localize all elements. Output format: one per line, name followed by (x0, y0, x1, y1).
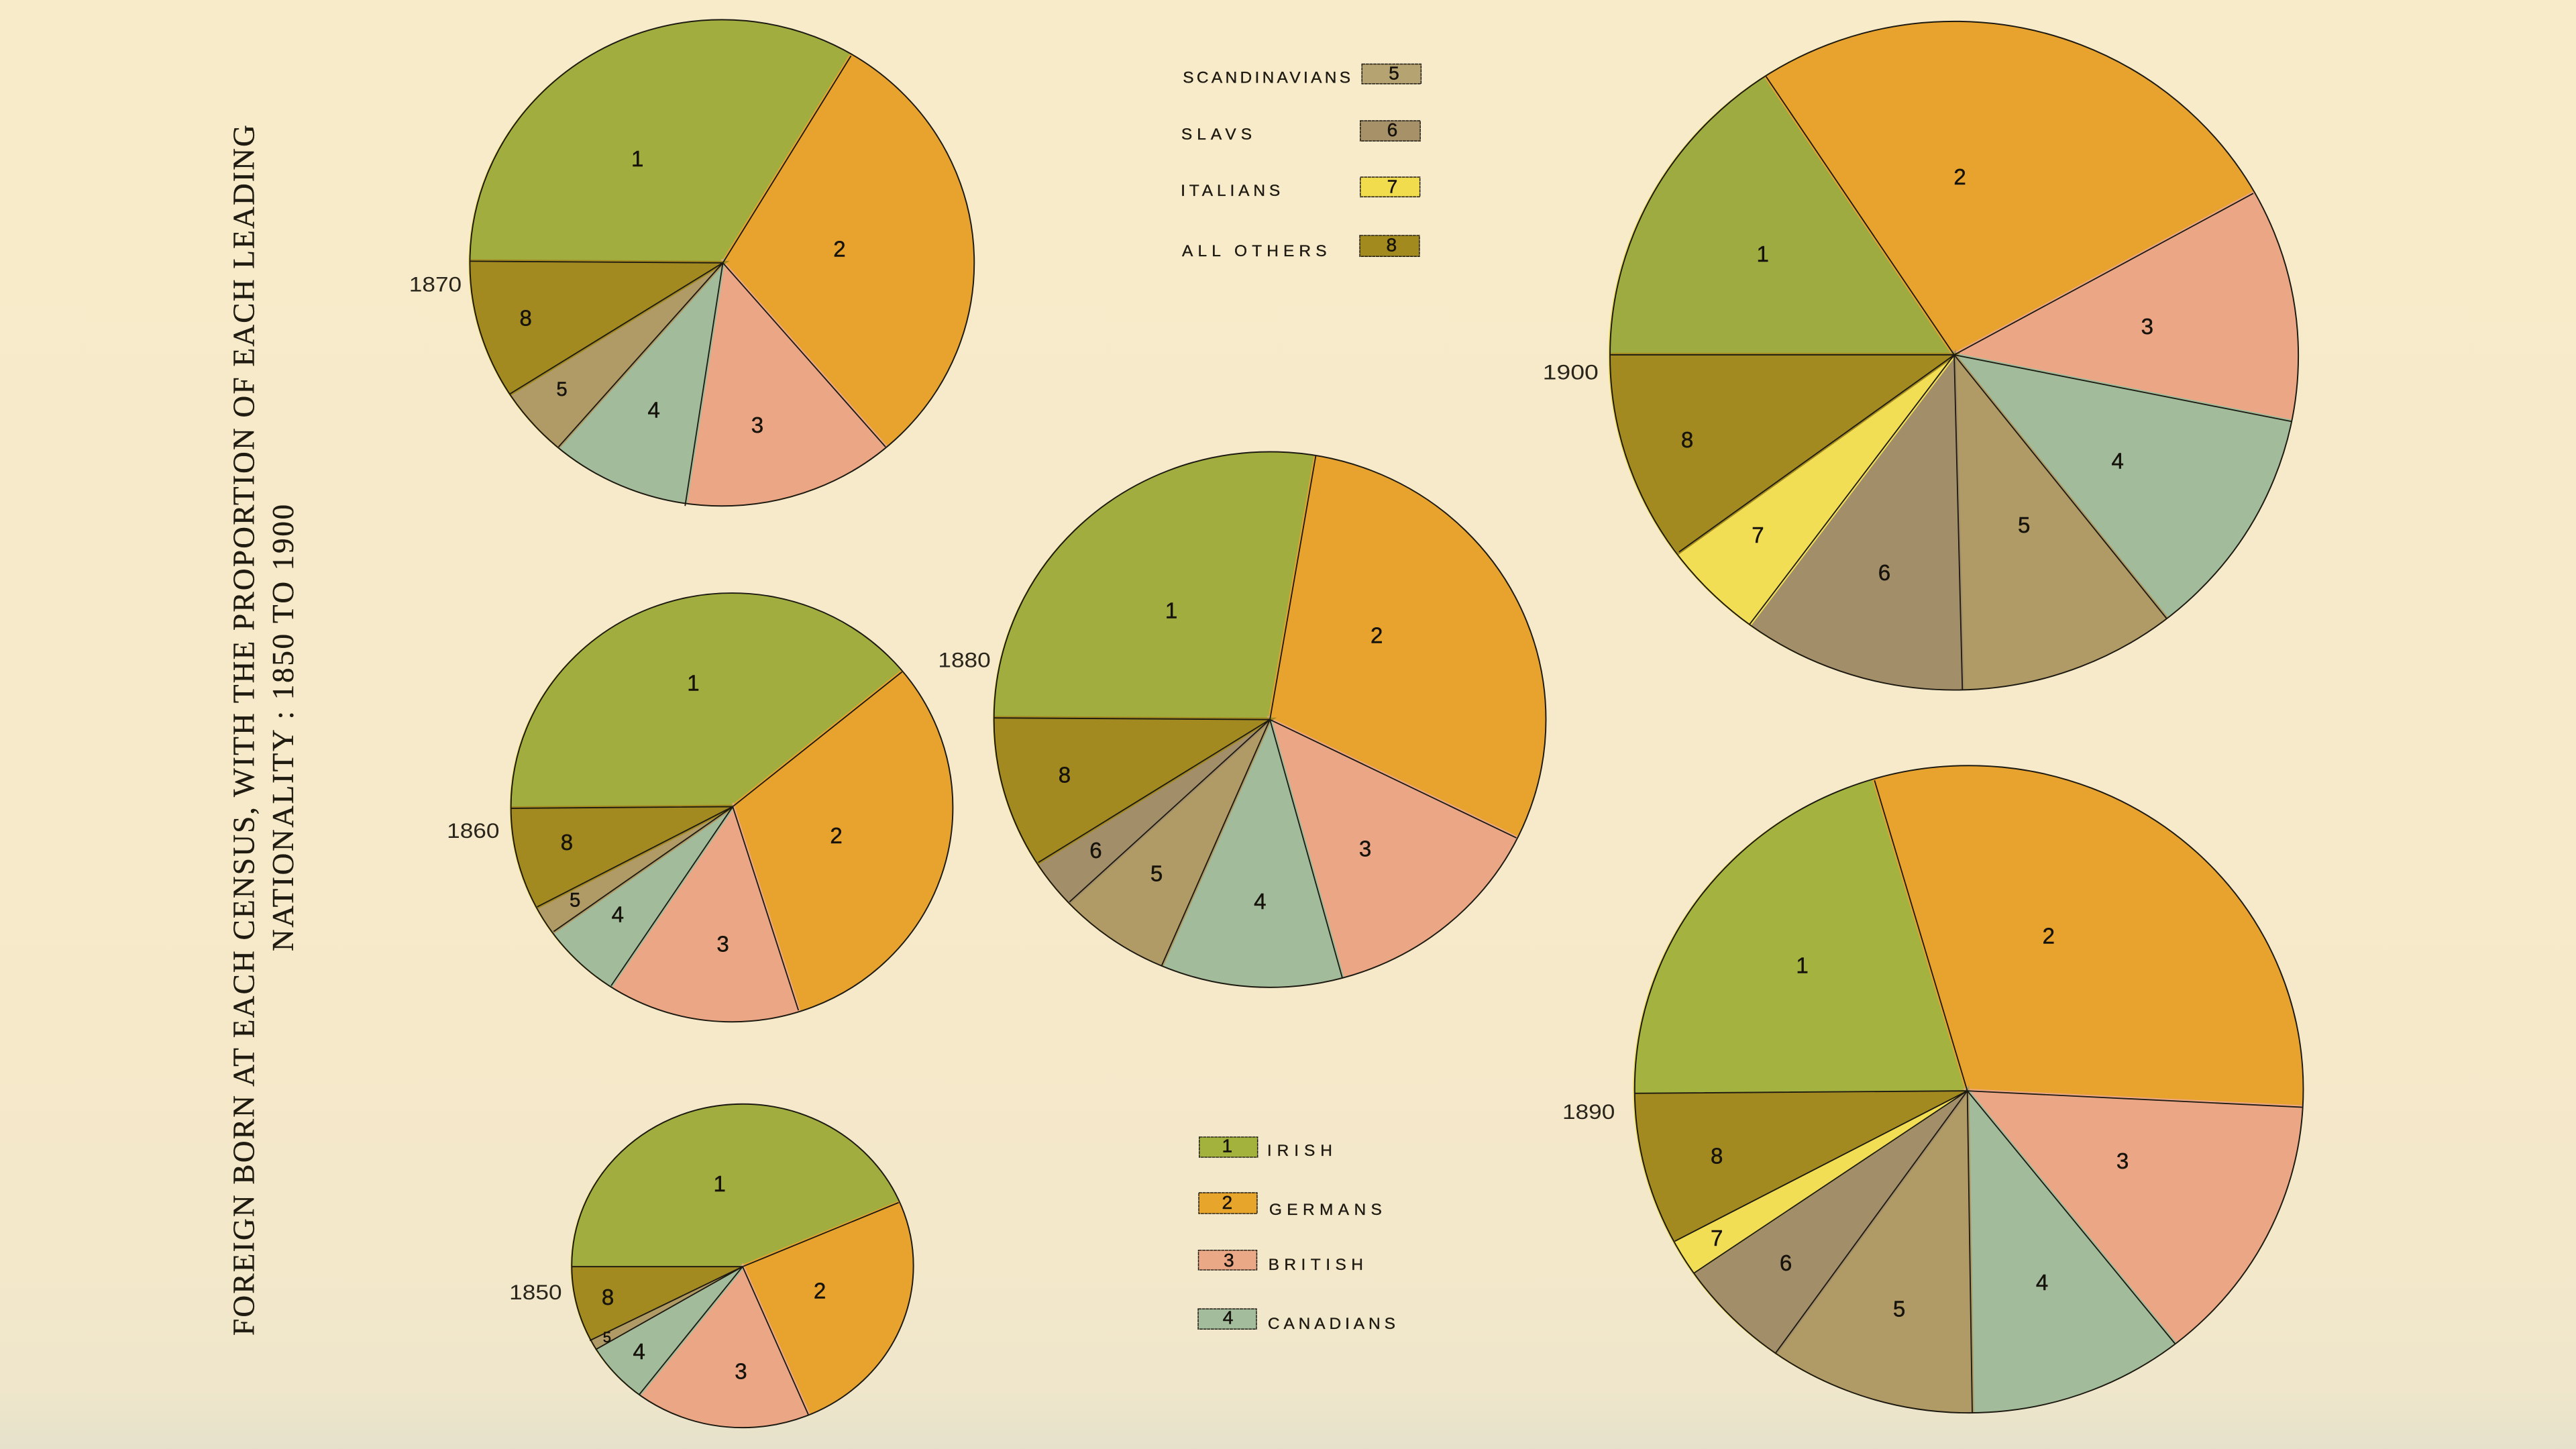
slice numbers 1870: 8 (519, 307, 532, 331)
legend item: Irish (1199, 1136, 1332, 1160)
legend item: Italians (1181, 176, 1420, 200)
legend item: Scandinavians (1183, 62, 1421, 87)
slice: Canadians 1880 (1161, 720, 1342, 987)
legend item: Irish: 1 (1222, 1136, 1232, 1157)
slice: all others 1850 (572, 1267, 743, 1340)
pie chart: 1900 (1609, 21, 2298, 690)
slice: Irish 1870 (470, 21, 851, 263)
slice: Irish 1860 (511, 594, 902, 808)
legend item: Italians: 7 (1387, 176, 1397, 197)
slice numbers 1900: 1 (1757, 242, 1769, 267)
legend item: Irish: IRISH (1267, 1142, 1332, 1160)
year label 1870: 1870 (409, 272, 462, 297)
slice numbers 1880: 1 (1165, 599, 1177, 624)
pie chart: 1860 (510, 593, 953, 1022)
title: vertical heading (227, 125, 300, 1336)
slice: Germans 1880 (1270, 455, 1545, 838)
slice numbers 1850: 5 (603, 1329, 611, 1346)
legend item: all others: ALL OTHERS (1182, 242, 1327, 260)
slice numbers 1900: 8 (1681, 428, 1693, 453)
slice numbers 1870: 3 (751, 413, 763, 438)
slice: Slavs 1890 (1694, 1091, 1968, 1354)
slice numbers 1880 (1059, 599, 1383, 914)
slice numbers 1870: 1 (631, 147, 643, 172)
slice: Scandinavians 1900 (1954, 355, 2167, 690)
slice: Irish 1890 (1635, 780, 1968, 1093)
pie chart: 1890 (1633, 765, 2304, 1413)
year label 1900: 1900 (1543, 360, 1599, 384)
slice: Canadians 1900 (1954, 355, 2292, 619)
slice numbers 1850: 1 (713, 1172, 726, 1197)
pie chart: 1850 (571, 1104, 914, 1428)
slice numbers 1900: 3 (2141, 315, 2153, 339)
slice: Italians 1890 (1675, 1091, 1968, 1273)
title: vertical heading: NATIONALITY : 1850 TO 1900 (266, 504, 300, 951)
slice: Slavs 1900 (1750, 355, 1962, 690)
legend item: Scandinavians: SCANDINAVIANS (1183, 68, 1350, 87)
slice: Germans 1870 (723, 56, 972, 447)
slice numbers 1890: 1 (1796, 953, 1809, 978)
legend item: Germans: GERMANS (1269, 1201, 1382, 1219)
slice numbers 1890: 8 (1711, 1144, 1723, 1169)
slice numbers 1880: 5 (1150, 861, 1163, 886)
slice numbers 1890: 3 (2116, 1149, 2129, 1174)
slice: Slavs 1880 (1038, 720, 1270, 902)
legend: lower, nationalities 1 to 4 (1198, 1136, 1395, 1333)
slice: Canadians 1860 (553, 806, 733, 985)
legend item: all others (1182, 234, 1419, 260)
slice numbers 1870: 5 (556, 378, 568, 400)
slice: Canadians 1850 (596, 1267, 743, 1395)
slice numbers 1900: 2 (1953, 165, 1966, 190)
slice: Scandinavians 1850 (590, 1267, 743, 1350)
slice: Italians 1900 (1679, 355, 1954, 625)
slice: Germans 1890 (1874, 767, 2304, 1108)
slice: Canadians 1870 (559, 263, 723, 506)
slice: British 1880 (1270, 720, 1516, 977)
year label 1860: 1860 (447, 818, 499, 843)
slice numbers 1850: 8 (602, 1285, 614, 1310)
slice numbers 1850: 2 (814, 1279, 826, 1303)
slice numbers 1870: 4 (647, 398, 660, 423)
slice: British 1900 (1954, 193, 2298, 421)
slice: all others 1860 (511, 806, 733, 907)
pie chart: 1880 (993, 451, 1546, 987)
slice: all others 1870 (470, 261, 723, 394)
slice: Canadians 1890 (1968, 1091, 2175, 1413)
legend item: Canadians: CANADIANS (1268, 1315, 1395, 1333)
legend item: Slavs (1181, 119, 1420, 144)
slice numbers 1890: 4 (2036, 1271, 2048, 1295)
title: vertical heading: FOREIGN BORN AT EACH CENSUS, WITH THE PROPORTION OF EACH LEADING (227, 125, 260, 1336)
slice numbers 1900: 6 (1878, 561, 1890, 586)
slice numbers 1900 (1681, 165, 2153, 586)
slice numbers 1860: 3 (716, 932, 729, 957)
legend item: Italians: ITALIANS (1181, 182, 1280, 200)
slice numbers 1860: 1 (687, 671, 700, 696)
slice numbers 1900: 5 (2018, 513, 2030, 538)
slice: Germans 1900 (1766, 23, 2253, 355)
slice numbers 1880: 8 (1059, 763, 1071, 788)
slice: Scandinavians 1860 (537, 806, 733, 932)
slice numbers 1880: 4 (1254, 890, 1267, 914)
slice: all others 1880 (994, 718, 1270, 863)
slice numbers 1850: 3 (735, 1359, 747, 1384)
legend item: British: 3 (1224, 1250, 1234, 1271)
year label 1850: 1850 (509, 1280, 562, 1304)
slice: Scandinavians 1890 (1775, 1091, 1972, 1413)
slice: Irish 1900 (1610, 76, 1954, 355)
slice numbers 1870: 2 (833, 237, 846, 262)
slice numbers 1900: 4 (2112, 449, 2124, 474)
slice numbers 1890: 6 (1780, 1251, 1792, 1276)
slice numbers 1860: 4 (612, 903, 624, 928)
pie chart: 1870 (468, 19, 974, 508)
slice numbers 1850 (602, 1172, 826, 1384)
slice numbers 1860: 5 (570, 890, 580, 912)
slice numbers 1860: 2 (830, 824, 843, 849)
legend item: British (1199, 1250, 1363, 1274)
legend item: Scandinavians: 5 (1389, 62, 1399, 83)
slice: all others 1890 (1635, 1091, 1968, 1241)
legend item: Canadians (1198, 1307, 1395, 1333)
legend item: all others: 8 (1386, 234, 1397, 255)
year label 1890: 1890 (1562, 1099, 1615, 1124)
year label 1880: 1880 (938, 647, 991, 672)
slice numbers 1890 (1711, 924, 2129, 1322)
slice numbers 1890: 2 (2043, 924, 2055, 949)
slice: Germans 1860 (733, 672, 951, 1010)
slice numbers 1870 (519, 147, 846, 438)
slice: Irish 1880 (994, 451, 1316, 720)
slice: Scandinavians 1870 (509, 263, 723, 447)
slice: Germans 1850 (743, 1203, 913, 1415)
slice: Irish 1850 (572, 1104, 900, 1267)
legend item: Slavs: 6 (1387, 119, 1397, 140)
legend item: Slavs: SLAVS (1181, 125, 1252, 144)
legend item: Canadians: 4 (1223, 1307, 1233, 1328)
slice numbers 1890: 5 (1893, 1297, 1905, 1322)
legend: upper, nationalities 5 to 8 (1181, 62, 1421, 260)
slice numbers 1880: 3 (1359, 837, 1371, 862)
slice: British 1870 (685, 263, 885, 508)
slice numbers 1890: 7 (1711, 1226, 1723, 1251)
slice numbers 1900: 7 (1752, 523, 1764, 548)
slice: all others 1900 (1610, 355, 1954, 552)
legend item: British: BRITISH (1269, 1256, 1363, 1274)
slice numbers 1880: 2 (1371, 623, 1383, 648)
slice numbers 1860 (561, 671, 843, 957)
slice numbers 1850: 4 (633, 1340, 645, 1364)
slice: British 1850 (639, 1267, 808, 1428)
slice: British 1890 (1968, 1091, 2303, 1344)
legend item: Germans (1199, 1192, 1382, 1219)
slice numbers 1880: 6 (1089, 839, 1102, 863)
legend item: Germans: 2 (1222, 1192, 1232, 1213)
slice: British 1860 (611, 806, 798, 1020)
slice numbers 1860: 8 (561, 830, 573, 855)
slice: Scandinavians 1880 (1069, 720, 1270, 966)
